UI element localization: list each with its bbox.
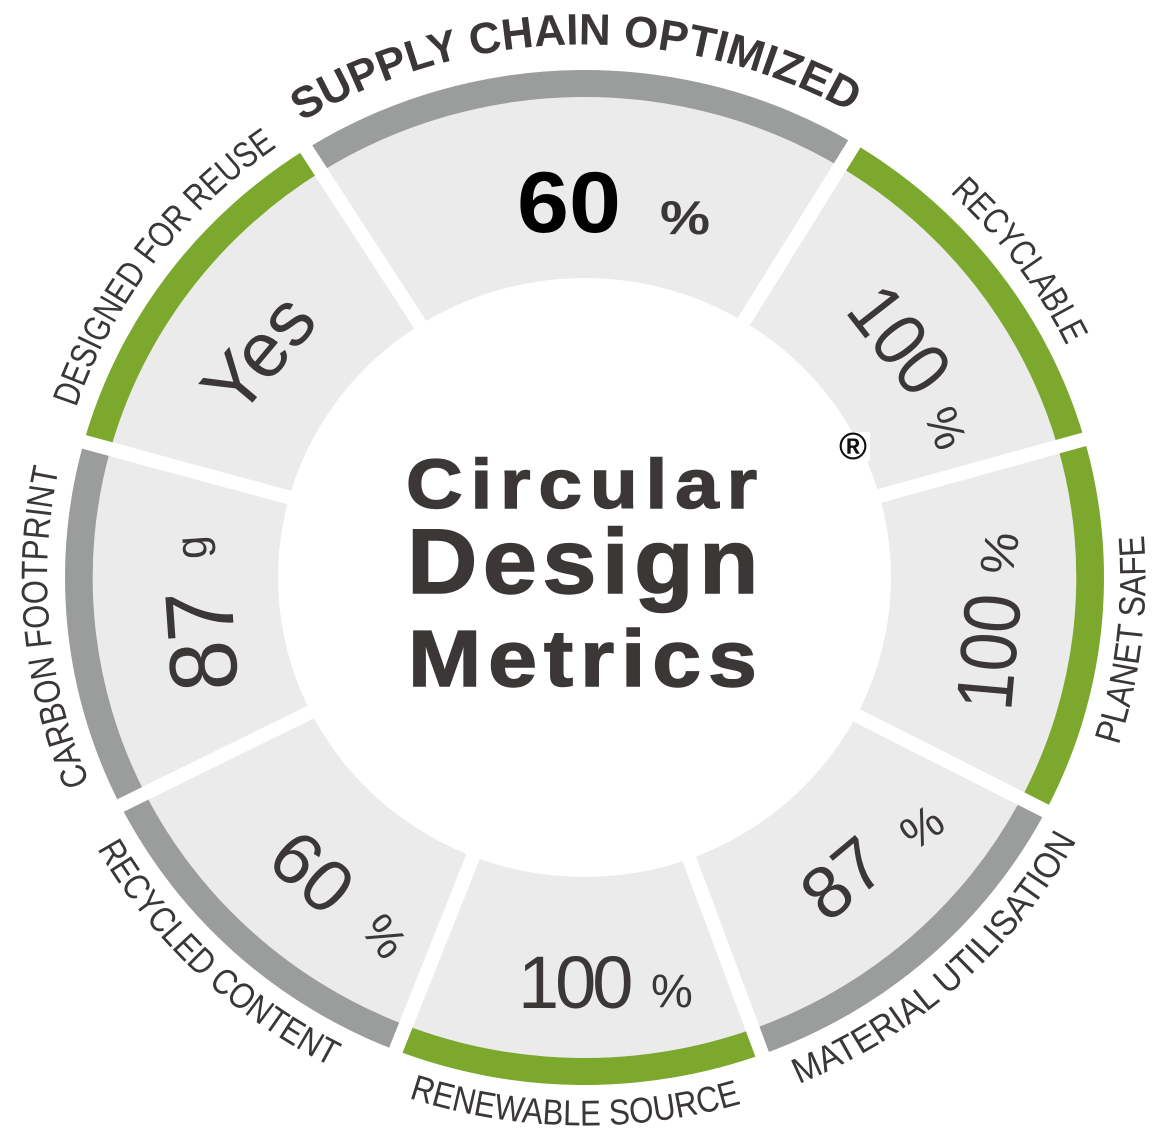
segment wedge	[406, 855, 753, 1058]
panel: planet safe	[860, 446, 1146, 805]
title line 3: Metrics	[408, 614, 764, 703]
segment wedge	[321, 97, 840, 326]
unit: percent: %	[352, 904, 418, 968]
curved label: RENEWABLE SOURCE	[411, 1075, 740, 1126]
value: 60: 60	[254, 814, 370, 930]
curved label: RECYCLABLE	[952, 176, 1088, 344]
registered trademark mark: ®	[839, 426, 867, 468]
segment wedge	[855, 447, 1076, 799]
unit: grams: g	[166, 534, 217, 561]
title: Circular Design Metrics	[406, 445, 765, 703]
curved label: RECYCLED CONTENT	[98, 838, 342, 1063]
unit: percent: %	[651, 964, 693, 1017]
panel: carbon footprint	[22, 448, 308, 800]
segment wedge	[689, 715, 1021, 1029]
value: Yes: Yes	[184, 277, 333, 431]
center white disc	[278, 278, 891, 877]
title line 2: Design	[407, 511, 764, 613]
curved label: SUPPLY CHAIN OPTIMIZED	[292, 14, 859, 118]
curved label: PLANET SAFE	[1095, 536, 1146, 743]
value: 100: 100	[939, 590, 1038, 713]
panel: recycled content	[98, 718, 466, 1063]
gray rim band	[753, 799, 1046, 1054]
title line 1: Circular	[406, 445, 765, 523]
green rim band	[840, 144, 1084, 447]
unit: percent: %	[914, 399, 978, 457]
panel: designed for reuse	[53, 128, 414, 490]
curved label: DESIGNED FOR REUSE	[53, 128, 276, 406]
green rim band	[1021, 439, 1104, 811]
panel: recyclable	[750, 148, 1088, 489]
segment wedge	[111, 172, 421, 498]
gray rim band	[120, 793, 406, 1050]
green rim band	[84, 149, 321, 449]
value: 100: 100	[518, 941, 631, 1024]
segment wedge	[743, 167, 1058, 496]
value: 87: 87	[145, 587, 259, 695]
gray rim band	[65, 442, 145, 806]
panel: supply chain optimized	[292, 14, 859, 321]
unit: percent: %	[890, 794, 953, 860]
unit: percent: %	[971, 528, 1030, 579]
segment wedge	[145, 711, 474, 1025]
unit: percent: %	[660, 191, 710, 244]
value: 60: 60	[517, 155, 621, 251]
value: 100: 100	[831, 269, 968, 411]
gray rim band	[306, 70, 854, 172]
panel: renewable source	[402, 859, 756, 1126]
value: 87: 87	[784, 820, 901, 937]
curved label: CARBON FOOTPRINT	[22, 464, 86, 787]
panel: material utilisation	[696, 722, 1076, 1083]
curved label: MATERIAL UTILISATION	[791, 830, 1076, 1083]
green rim band	[396, 1025, 762, 1085]
segment wedge	[93, 449, 312, 793]
